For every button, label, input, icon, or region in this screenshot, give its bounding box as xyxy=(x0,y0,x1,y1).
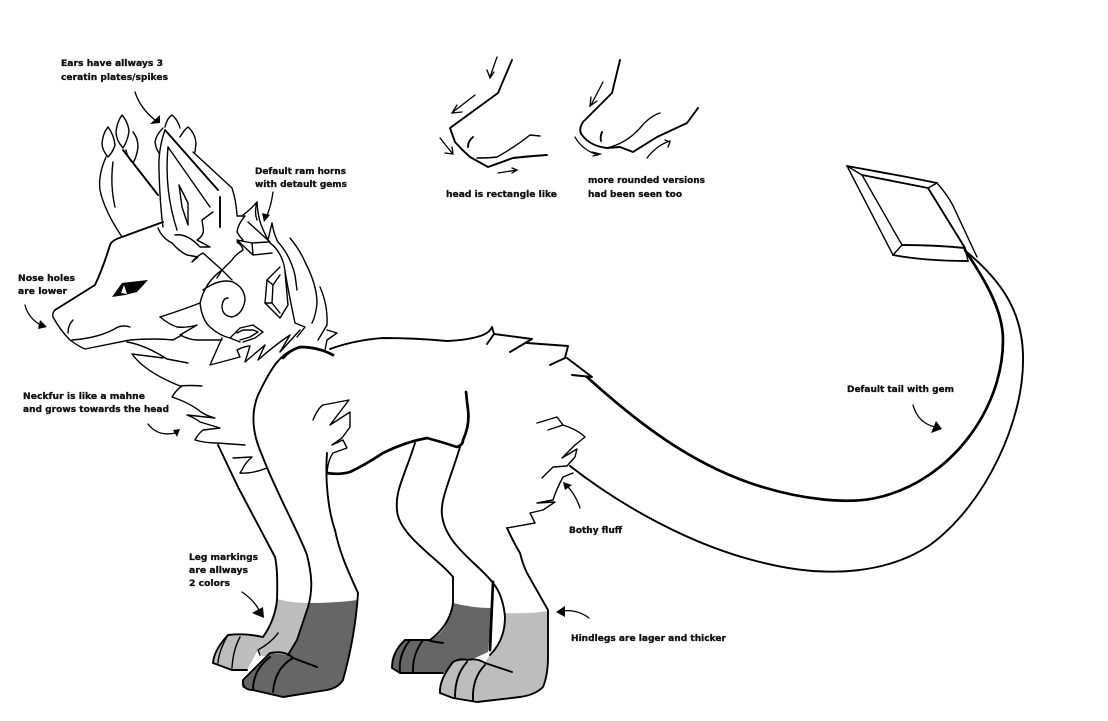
arrow: ears xyxy=(135,92,160,124)
label: leg markings xyxy=(189,552,259,589)
character: neck mane xyxy=(127,202,337,473)
label: rounded versions: had been seen too xyxy=(588,189,682,200)
character: far front leg xyxy=(213,445,308,670)
label: nose holes: Nose holes xyxy=(18,273,76,284)
label: leg markings: are allways xyxy=(189,565,249,576)
arrow: nose xyxy=(25,305,47,329)
label: ears: Ears have allways 3 xyxy=(61,58,163,69)
label: ram horns: Default ram horns xyxy=(255,166,347,177)
arrow: leg markings xyxy=(242,592,264,618)
arrow: ram horns xyxy=(262,192,273,222)
icon: eye xyxy=(112,280,148,297)
character: head xyxy=(53,222,222,349)
label: tail: Default tail with gem xyxy=(847,384,954,395)
arrow: neckfur xyxy=(148,424,180,437)
head sketch: rectangular xyxy=(440,57,547,173)
label: leg markings: 2 colors xyxy=(189,578,231,589)
label: ears xyxy=(61,58,169,83)
label: neckfur xyxy=(23,391,169,415)
label: ears: ceratin plates/spikes xyxy=(61,72,169,83)
label: leg markings: Leg markings xyxy=(189,552,259,563)
leg marking fills xyxy=(213,599,548,702)
label: hindlegs: Hindlegs are lager and thicker xyxy=(571,633,726,644)
arrow: hindlegs xyxy=(556,606,589,618)
label: bothy fluff: Bothy fluff xyxy=(569,525,623,536)
character: ram horn with gems xyxy=(200,222,288,342)
character: near front leg xyxy=(243,453,358,697)
icon: tail gem xyxy=(847,166,977,261)
label: neckfur: Neckfur is like a mahne xyxy=(23,391,145,402)
character: back ear xyxy=(100,115,158,237)
label: ram horns xyxy=(255,166,348,190)
character: far hind leg xyxy=(392,443,505,673)
label: rounded versions: more rounded versions xyxy=(588,175,706,186)
arrow: tail xyxy=(913,405,942,433)
character: near hind leg xyxy=(440,528,548,702)
label: ram horns: with detault gems xyxy=(255,179,348,190)
character: tail xyxy=(570,250,1023,572)
character: body and back xyxy=(253,327,592,607)
label: neckfur: and grows towards the head xyxy=(23,404,169,415)
label: rounded versions xyxy=(588,175,706,200)
character: front ear xyxy=(155,115,257,270)
arrow: bothy fluff xyxy=(563,482,580,508)
label: nose holes xyxy=(18,273,76,297)
head sketch: rounded xyxy=(575,60,698,158)
label: head rectangle: head is rectangle like xyxy=(446,189,557,200)
label: nose holes: are lower xyxy=(18,286,67,297)
